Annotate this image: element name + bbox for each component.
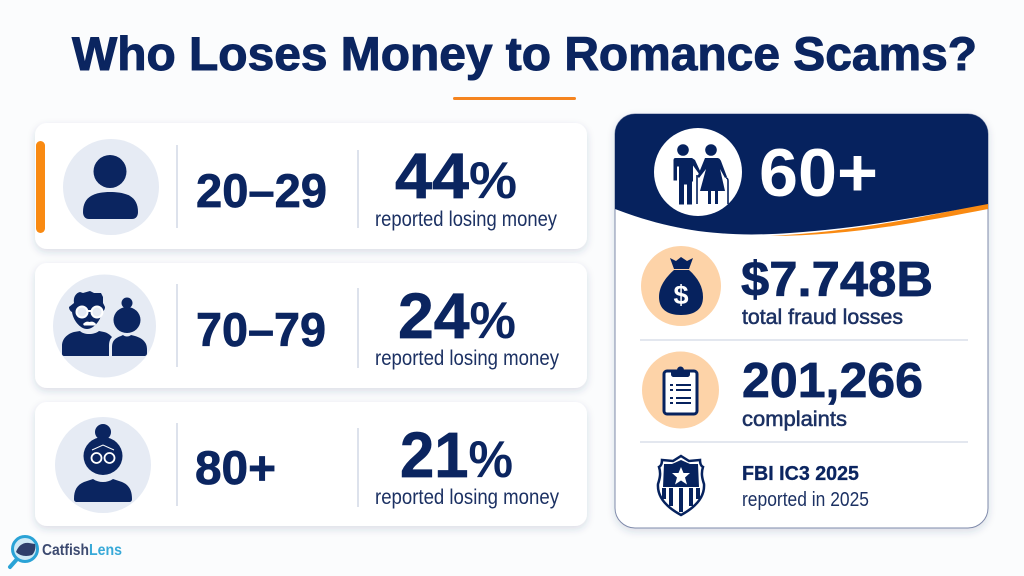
- title underline accent: [453, 97, 576, 100]
- percentage: 44%: [395, 140, 517, 212]
- orange accent bar: [36, 141, 45, 233]
- title: Who Loses Money to Romance Scams?: [72, 27, 977, 80]
- caption: reported losing money: [375, 347, 559, 370]
- source date: reported in 2025: [742, 489, 869, 511]
- caption: reported losing money: [375, 486, 559, 509]
- age heading: 60+: [759, 135, 878, 211]
- icon: money bag: $: [673, 280, 689, 310]
- caption: complaints: [742, 408, 847, 431]
- source name: FBI IC3 2025: [742, 463, 859, 485]
- caption: total fraud losses: [742, 306, 903, 329]
- panel: age 80+: [35, 402, 587, 526]
- logo: CatfishLens: [10, 536, 122, 567]
- age label: 80+: [195, 441, 276, 494]
- panel: 60+ statistics: [615, 114, 988, 528]
- stat: fraud losses: [641, 246, 933, 329]
- panel: age 20–29: [35, 123, 587, 249]
- age label: 70–79: [196, 303, 326, 356]
- icon: clipboard: [642, 352, 719, 428]
- logo: CatfishLens: Lens: [89, 542, 122, 559]
- percentage: 21%: [400, 419, 513, 491]
- icon: older couple: [53, 274, 156, 378]
- icon: single person: [63, 139, 159, 235]
- panel: age 70–79: [35, 263, 587, 388]
- value: 201,266: [742, 354, 923, 408]
- caption: reported losing money: [375, 208, 557, 231]
- value: $7.748B: [741, 253, 933, 307]
- age label: 20–29: [196, 164, 327, 217]
- icon: elderly couple in circle: [654, 128, 742, 216]
- icon: police shield: [658, 456, 704, 515]
- header band: [615, 114, 988, 236]
- icon: magnifier with catfish: [10, 536, 38, 567]
- icon: money bag: [641, 246, 721, 326]
- icon: older woman: [55, 417, 151, 513]
- percentage: 24%: [398, 280, 516, 352]
- source: [658, 456, 869, 515]
- logo: CatfishLens: Catfish: [42, 542, 89, 559]
- stat: complaints: [642, 352, 923, 431]
